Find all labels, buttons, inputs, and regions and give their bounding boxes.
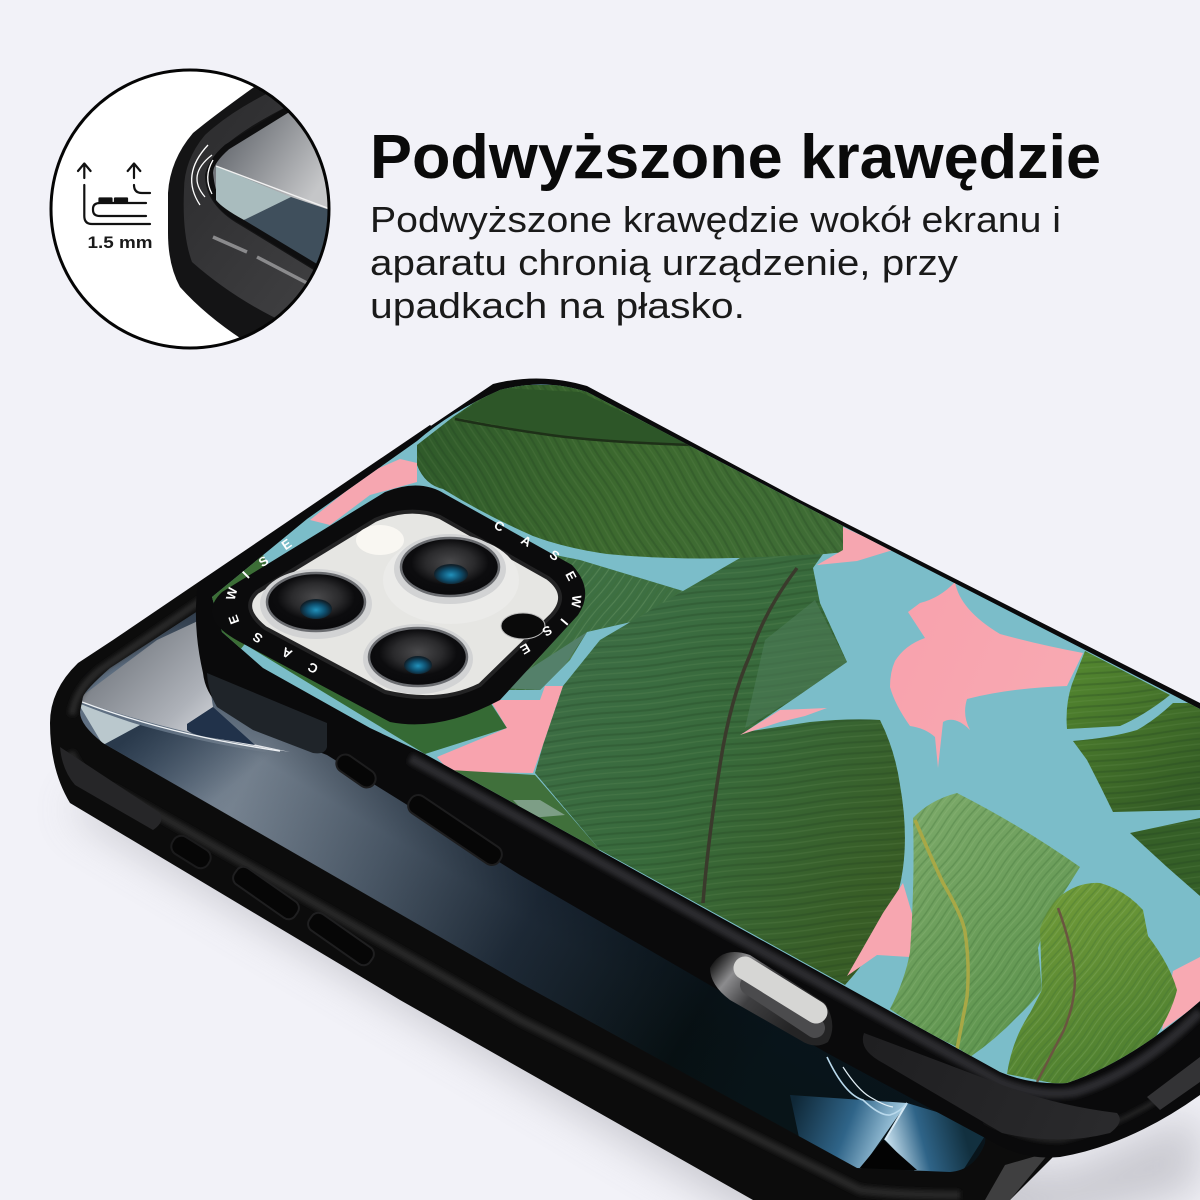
- silver button: [710, 952, 832, 1046]
- camera ring brand text: E: [279, 535, 295, 553]
- body text: aparatu chronią urządzenie, przy: [370, 242, 958, 283]
- flash: [356, 525, 404, 555]
- measurement label: 1.5 mm: [88, 233, 152, 252]
- front phone oval button: [333, 751, 379, 791]
- frame bottom light pad: [863, 1033, 1120, 1140]
- front phone frame: [196, 378, 1200, 1158]
- screen dark wallpaper block: [105, 725, 255, 798]
- leaf: right 1: [1067, 651, 1170, 729]
- screen glass reflection: [70, 620, 290, 752]
- front phone: [196, 378, 1200, 1158]
- zoomed phone corner: [168, 87, 328, 338]
- back phone: [50, 425, 1060, 1200]
- pink bud top: [817, 527, 893, 565]
- lens: top right: [394, 534, 506, 604]
- camera ring brand text: E: [562, 569, 580, 584]
- bumper band: [184, 94, 314, 318]
- screen dark lower: [244, 197, 330, 264]
- back phone corner pad: [60, 747, 161, 830]
- leaf: right 3: [1130, 818, 1200, 896]
- body text: upadkach na płasko.: [370, 285, 745, 326]
- camera ring brand text: A: [279, 644, 295, 662]
- camera ring brand text: S: [539, 622, 555, 640]
- glass edge line: [216, 166, 330, 209]
- artwork background: [200, 380, 1200, 1090]
- leaf: big centre: [535, 554, 905, 985]
- back phone frame ridge: [70, 752, 960, 1195]
- camera ring: [212, 485, 585, 724]
- icon: raised edge diagram: [78, 164, 150, 224]
- leaf: light green: [890, 793, 1080, 1057]
- camera ring brand text: E: [225, 613, 242, 626]
- bumper highlight: [213, 237, 307, 283]
- front phone long button: [405, 792, 505, 868]
- frame left pad: [207, 673, 327, 753]
- leaf: behind centre: [500, 555, 683, 690]
- back phone frame: [50, 425, 1060, 1200]
- camera ring brand text: W: [223, 585, 241, 602]
- camera ring brand text: A: [518, 532, 535, 550]
- detail circle: [51, 70, 345, 348]
- pink bud bottom: [847, 883, 913, 976]
- screen glass tint: [216, 166, 291, 220]
- leaf: right 2: [1073, 703, 1200, 812]
- body text: Podwyższone krawędzie wokół ekranu i: [370, 199, 1061, 240]
- leaf: lower left: [450, 770, 600, 850]
- camera ring brand text: S: [256, 552, 272, 570]
- artwork: [200, 380, 1200, 1090]
- pink bud right edge: [1162, 957, 1200, 1030]
- camera ring brand text: I: [239, 568, 252, 581]
- microphone hole: [501, 613, 545, 639]
- lens: left: [260, 569, 372, 639]
- camera ring brand text: S: [250, 629, 265, 646]
- screen upper: [209, 113, 328, 220]
- pink flower behind camera: [310, 459, 417, 525]
- camera ring brand text: C: [491, 517, 508, 535]
- title: Podwyższone krawędzie: [370, 123, 1101, 192]
- frame right pad: [1147, 1057, 1200, 1110]
- back phone button second: [305, 910, 377, 968]
- camera ring brand text: [223, 517, 584, 677]
- frame lower gloss: [985, 1070, 1200, 1140]
- camera ring brand text: C: [305, 659, 321, 677]
- leaf: olive green: [1007, 883, 1177, 1086]
- leaf: under camera: [221, 629, 507, 754]
- body text: [370, 199, 1061, 326]
- camera ring brand text: S: [547, 547, 563, 564]
- white motion arcs: [192, 145, 213, 205]
- lens: bottom: [363, 624, 473, 694]
- screen blue wallpaper glow: [790, 1095, 907, 1170]
- back phone screen: [80, 612, 986, 1172]
- pink flower right: [890, 582, 1083, 768]
- camera inner window: [250, 512, 560, 697]
- circle outline: [51, 70, 329, 348]
- camera lens plate: [383, 536, 519, 624]
- pink flower bottom left: [437, 686, 563, 773]
- pink bud centre: [740, 708, 827, 735]
- drop shadow under phones: [70, 790, 1200, 1200]
- back phone button long: [230, 864, 302, 922]
- camera module: [212, 485, 585, 724]
- frame ridge along artwork: [410, 758, 1200, 1094]
- leaf sliver left of camera: [212, 555, 266, 648]
- back phone top ridge: [72, 505, 340, 715]
- camera ring brand text: E: [517, 640, 533, 658]
- back phone button small: [168, 832, 214, 872]
- leaf: top large: [417, 385, 845, 558]
- camera ring brand text: W: [568, 595, 584, 609]
- circle background: [51, 70, 329, 348]
- camera ring brand text: I: [558, 616, 571, 628]
- back phone bottom-right sliver: [985, 1152, 1050, 1200]
